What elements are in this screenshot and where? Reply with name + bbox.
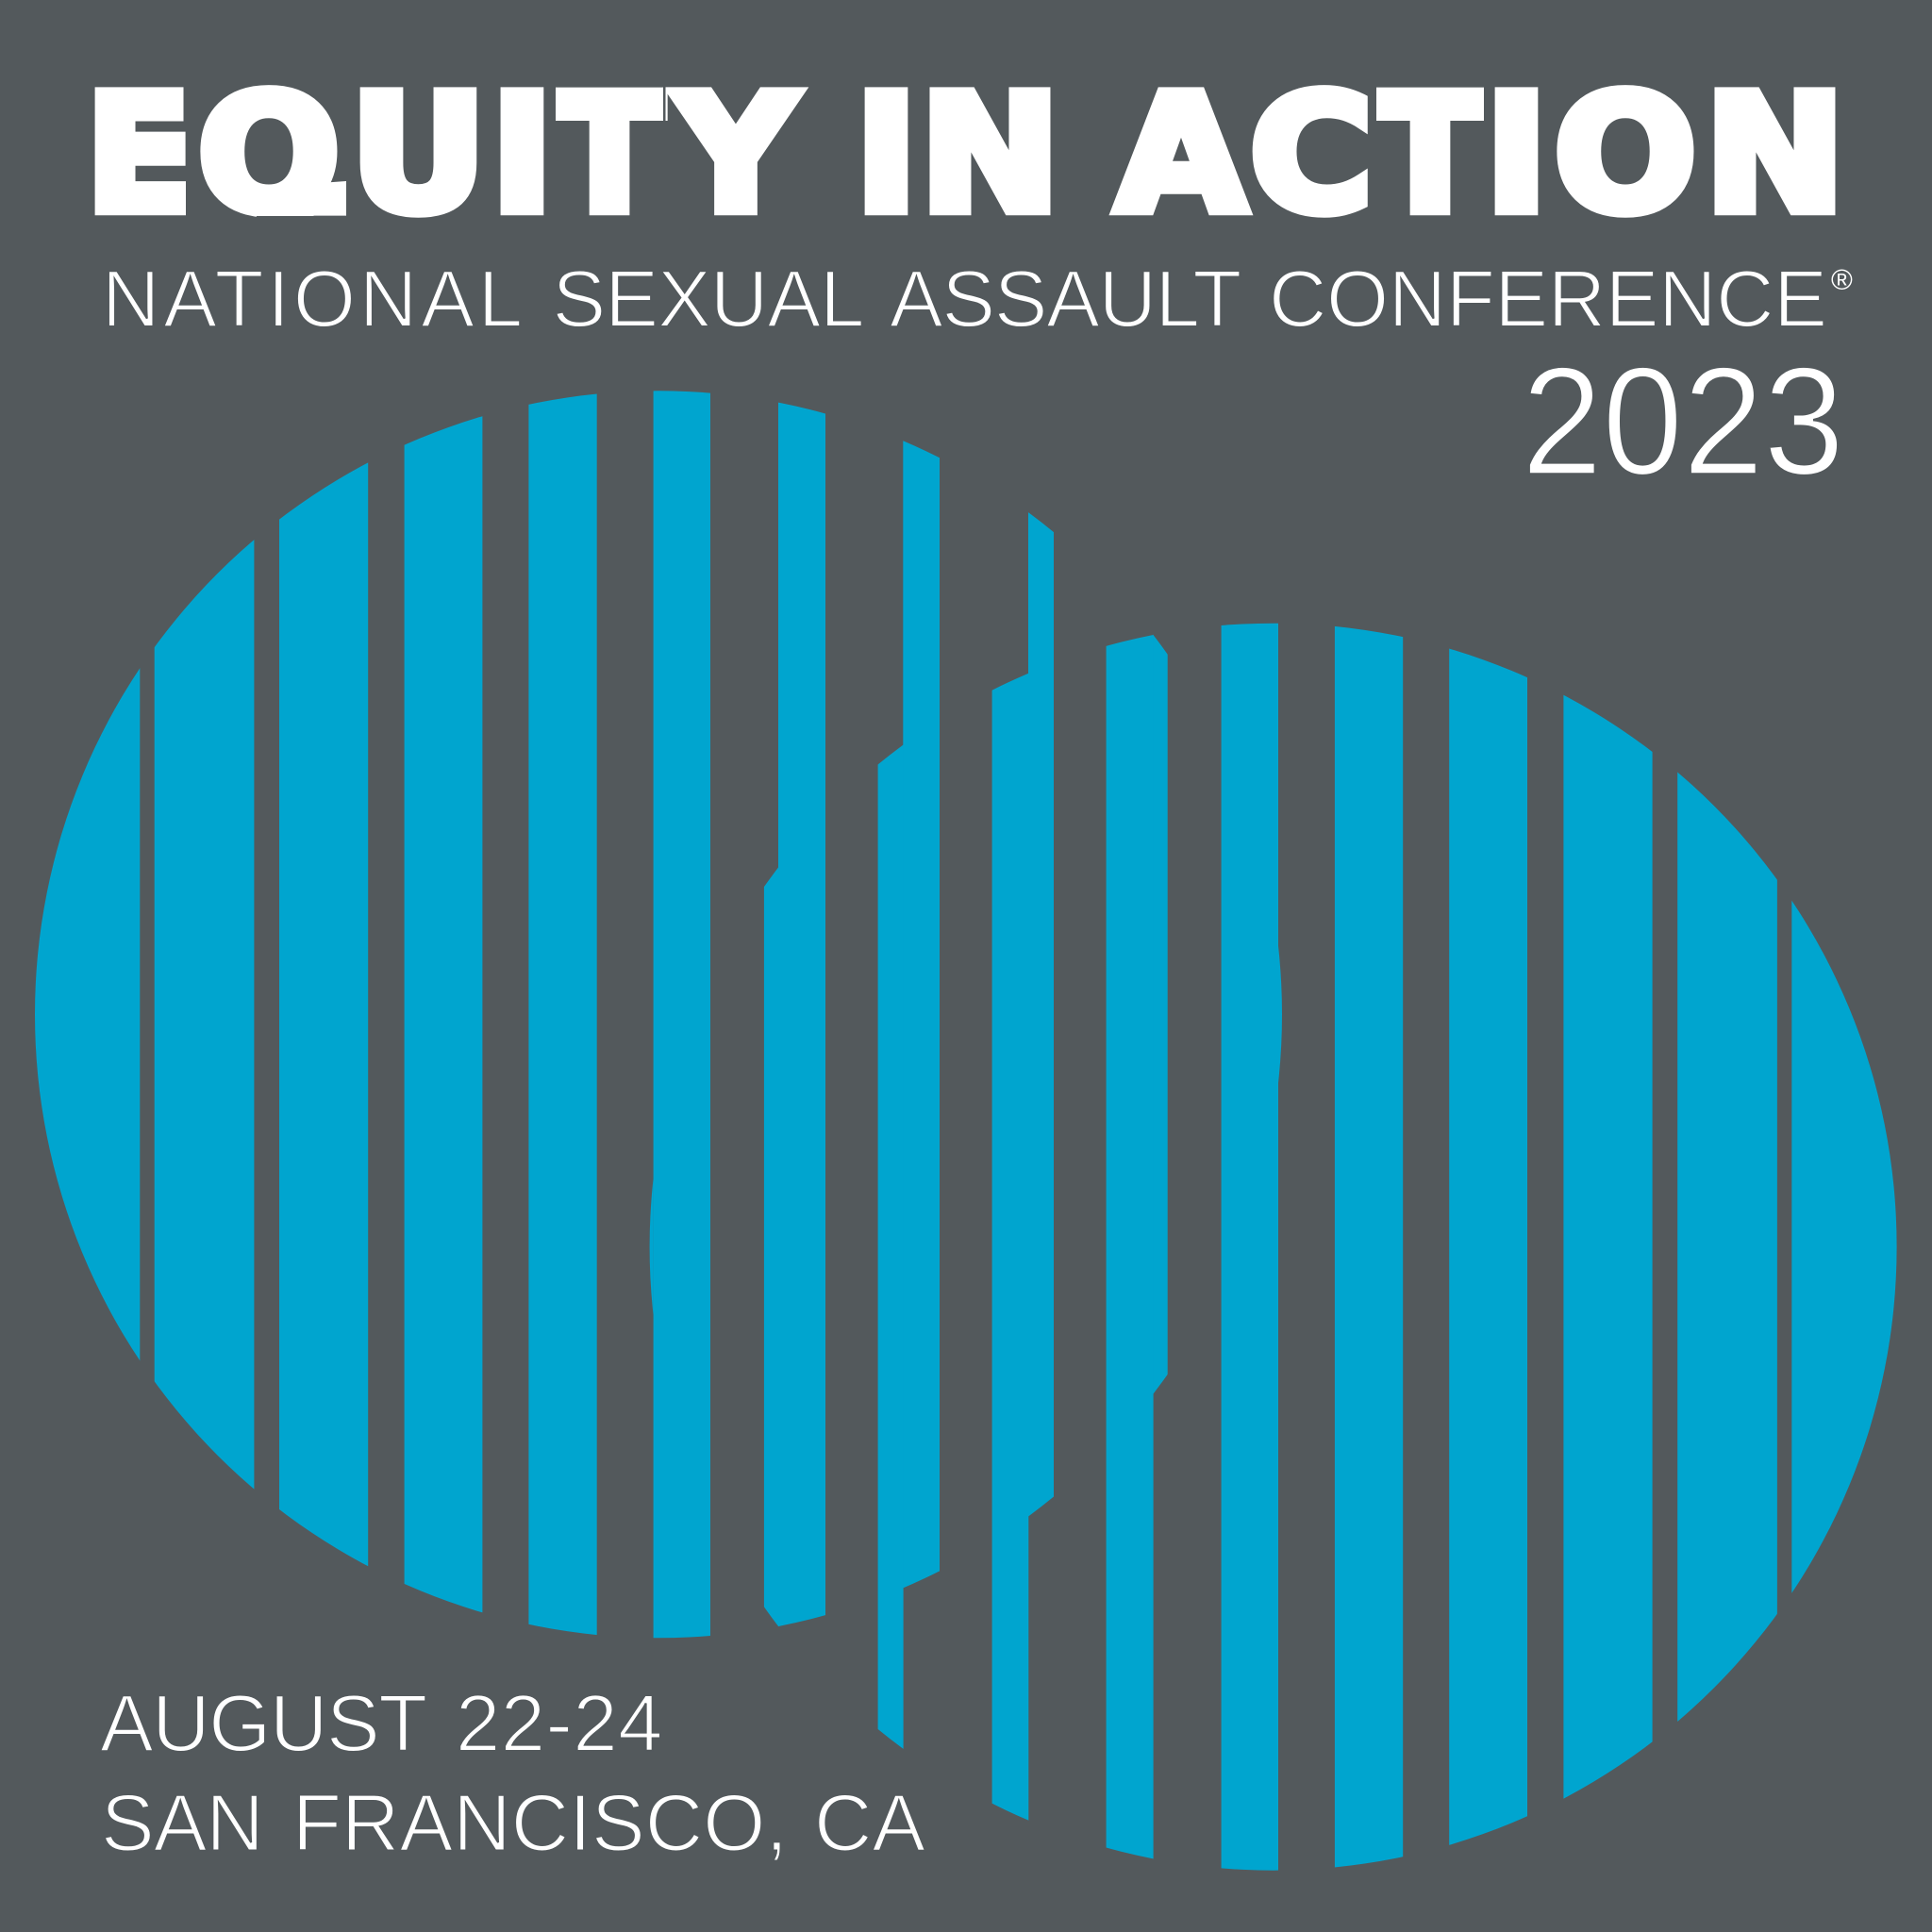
subtitle: SEXUAL (553, 255, 882, 344)
right striped circle (650, 624, 1897, 1871)
registered mark: ® (1831, 263, 1853, 296)
date: 22-24 (456, 1679, 663, 1769)
subtitle: NATIONAL (102, 255, 549, 344)
subtitle: CONFERENCE (1269, 255, 1827, 344)
striped circles graphic (35, 391, 1897, 1871)
left striped circle (35, 391, 1282, 1638)
subtitle: ASSAULT (890, 255, 1260, 344)
event details (100, 1679, 925, 1868)
location: CA (814, 1779, 925, 1868)
date: AUGUST (100, 1679, 445, 1769)
subtitle (102, 255, 1853, 344)
year: 2023 (1522, 334, 1844, 508)
title: EQUITY IN ACTION (83, 58, 1844, 247)
location: SAN (101, 1779, 284, 1868)
location: FRANCISCO, (292, 1779, 810, 1868)
